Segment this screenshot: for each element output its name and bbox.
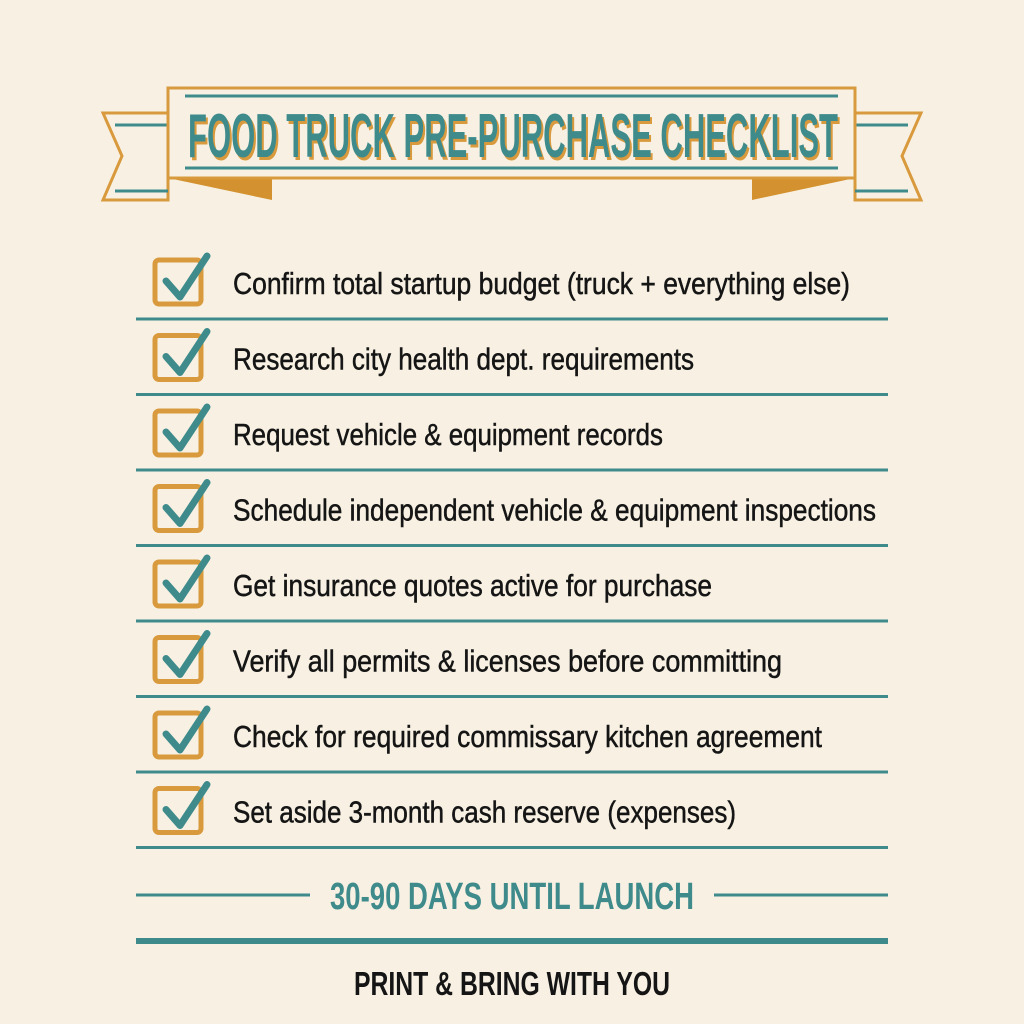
item 2: [136, 332, 888, 394]
item 5: Get insurance quotes active for purchase: [233, 568, 712, 603]
item 4: Schedule independent vehicle & equipment inspections: [233, 492, 876, 528]
item 2: Research city health dept. requirements: [233, 342, 694, 376]
item 3: Request vehicle & equipment records: [233, 417, 663, 452]
footer note: PRINT & BRING WITH YOU: [354, 965, 670, 1002]
item 4: [136, 482, 888, 546]
item 5: [136, 558, 888, 621]
item 6: [136, 634, 888, 696]
item 8: Set aside 3-month cash reserve (expenses): [233, 794, 736, 830]
item 1: [136, 256, 888, 319]
item 6: Verify all permits & licenses before committing: [233, 644, 782, 678]
timeline banner: 30-90 DAYS UNTIL LAUNCH: [330, 876, 694, 918]
item 1: Confirm total startup budget (truck + everything else): [233, 266, 850, 301]
banner left tail: [103, 113, 168, 200]
banner right tail: [855, 113, 921, 200]
item 8: [136, 784, 888, 848]
title banner: [103, 88, 921, 200]
banner folds: [168, 178, 272, 200]
item 3: [136, 407, 888, 470]
banner main: [168, 88, 855, 178]
item 7: [136, 709, 888, 772]
checklist: [136, 256, 888, 848]
item 7: Check for required commissary kitchen agreement: [233, 719, 822, 754]
